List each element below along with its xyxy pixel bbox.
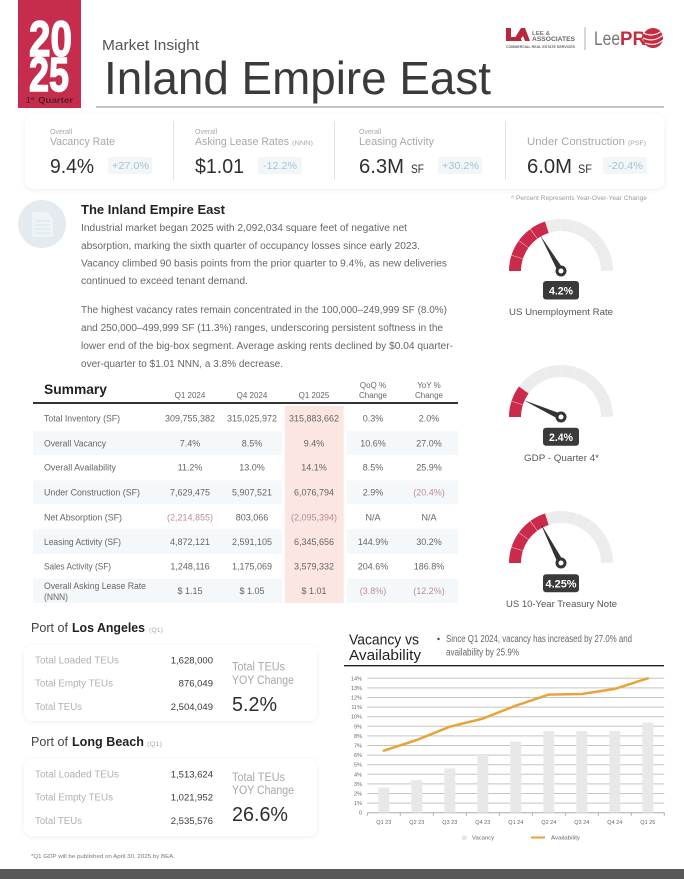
logo: Lee & Associates: COMMERCIAL REAL ESTATE SERVICES [506, 45, 576, 49]
table column headers: Q1 2024 [175, 391, 206, 400]
gauge: US 10-year treasury note: 4.25% [546, 578, 577, 590]
x axis labels: Q1 25 [640, 820, 655, 826]
text block: vacancy note [437, 634, 632, 659]
row: total inventory [44, 414, 439, 424]
year badge: 2025 1st Quarter: st [30, 96, 35, 101]
heading: Vacancy vs Availability: Availability [349, 648, 422, 664]
y axis labels [351, 676, 362, 817]
row: overall vacancy: Overall Vacancy [44, 438, 106, 448]
row: net absorption: Net Absorption (SF) [44, 512, 122, 522]
row: under construction: 5,907,521 [232, 488, 272, 498]
row: sales activity: 204.6% [358, 562, 388, 572]
panel: Los Angeles port stats: Total TEUs [35, 702, 82, 713]
table heading: Summary: Summary [44, 381, 107, 397]
row: sales activity: 1,175,069 [232, 562, 272, 572]
metric: under construction: 6.0M [527, 156, 572, 178]
y axis labels: 4% [354, 772, 362, 778]
text block: vacancy note: Since Q1 2024, vacancy has increased by 27.0% and [446, 634, 632, 645]
metric: leasing activity: Overall [359, 129, 382, 136]
panel: Long Beach port stats: 2,535,576 [171, 816, 213, 827]
panel: Los Angeles port stats: YOY Change [232, 675, 294, 687]
panel: Long Beach port stats: 1,021,952 [171, 792, 213, 804]
x axis labels: Q4 23 [475, 820, 490, 826]
icon: document [18, 200, 66, 248]
panel: Long Beach port stats: Total TEUs [232, 772, 285, 784]
row: leasing activity: 2,591,105 [232, 537, 272, 547]
panel: Long Beach port stats: 1,513,624 [171, 770, 213, 780]
text block: vacancy note: availability by 25.9% [446, 648, 519, 659]
row: net absorption: (2,095,394) [291, 512, 337, 522]
row: overall asking lease rate: (NNN) [44, 592, 68, 602]
row: overall availability [44, 463, 442, 473]
y axis labels: 3% [354, 782, 362, 788]
text block: market commentary: absorption, marking the sixth quarter of occupancy losses since early 2023. [81, 241, 420, 252]
panel: Los Angeles port stats: 1,628,000 [171, 656, 213, 666]
row: overall vacancy: 7.4% [180, 438, 200, 448]
text block: market commentary [81, 202, 453, 370]
row: net absorption: (2,214,855) [167, 512, 213, 522]
logo: LeePRO [594, 28, 663, 50]
metric: asking lease rates: Overall [195, 129, 218, 136]
x axis labels: Q1 24 [508, 820, 523, 826]
vacancy bars [378, 722, 653, 813]
row: under construction: 2.9% [363, 488, 383, 498]
table column headers: QoQ % [360, 381, 386, 390]
metric: asking lease rates [195, 129, 313, 178]
row: leasing activity: 30.2% [416, 537, 442, 547]
panel: Long Beach port stats: YOY Change [232, 785, 294, 797]
row: overall availability: 25.9% [416, 463, 442, 473]
table column headers: YoY % [417, 381, 441, 390]
text block: market commentary: lower end of the big-box segment. Average asking rents declined by $0.04 quarter- [81, 341, 453, 352]
panel: Los Angeles port stats: 876,049 [179, 678, 213, 690]
y axis labels: 6% [354, 753, 362, 759]
row: overall asking lease rate [44, 581, 445, 602]
availability line [384, 678, 648, 751]
row: overall vacancy: 27.0% [416, 438, 442, 448]
x axis labels [376, 820, 655, 826]
row: overall asking lease rate: $ 1.05 [239, 586, 265, 596]
y axis labels: 8% [354, 734, 362, 740]
heading: Port of Long Beach: Long Beach [72, 735, 144, 749]
x axis labels: Q2 23 [409, 820, 424, 826]
footer bar [0, 869, 684, 879]
panel: Los Angeles port stats: 5.2% [232, 694, 277, 716]
chart legend: Availability [551, 836, 580, 842]
x axis labels: Q3 24 [574, 820, 589, 826]
heading: Port of Long Beach: Port of [31, 735, 69, 749]
row: under construction: 6,076,794 [294, 488, 334, 498]
x axis labels: Q4 24 [607, 820, 622, 826]
logo: Lee & Associates: ASSOCIATES [532, 37, 575, 43]
table: summary [33, 381, 458, 603]
row: overall asking lease rate: $ 1.01 [301, 586, 327, 596]
panel: Los Angeles port stats: 2,504,049 [171, 702, 213, 713]
metric: asking lease rates: (NNN) [292, 141, 313, 147]
text block: market commentary: The Inland Empire East [81, 202, 226, 217]
table column headers: Q4 2024 [237, 391, 268, 400]
row: overall asking lease rate: Overall Asking Lease Rate [44, 581, 146, 591]
y axis labels: 10% [351, 715, 362, 721]
heading: Port of Los Angeles: Los Angeles [72, 621, 145, 635]
heading: Vacancy vs Availability [349, 632, 422, 664]
heading: Port of Long Beach: (Q1) [147, 741, 162, 748]
row: sales activity: 1,248,116 [170, 562, 210, 572]
row: total inventory: 0.3% [363, 414, 383, 424]
row: under construction [44, 488, 445, 498]
y axis labels: 13% [351, 686, 362, 692]
metric: under construction: (PSF) [628, 141, 646, 147]
panel: Long Beach port stats [24, 759, 317, 836]
metric: leasing activity: SF [411, 162, 424, 176]
chart: vacancy bars and availability line [351, 676, 664, 842]
y axis labels: 0 [359, 811, 362, 817]
panel: Long Beach port stats: Total Empty TEUs [35, 792, 113, 804]
row: overall vacancy [44, 438, 442, 448]
row: leasing activity: 4,872,121 [170, 537, 210, 547]
row: overall availability: 13.0% [239, 463, 265, 473]
metric: leasing activity [359, 129, 482, 178]
panel: Long Beach port stats: 26.6% [232, 804, 288, 826]
row: total inventory: Total Inventory (SF) [44, 414, 120, 424]
panel: Long Beach port stats: Total TEUs [35, 816, 82, 827]
metric: leasing activity: +30.2% [442, 161, 479, 172]
text block: market commentary: and 250,000–499,999 SF (11.3%) ranges, underscoring persistent softness in the [81, 323, 443, 334]
metric: under construction: -20.4% [608, 161, 643, 172]
y axis labels: 9% [354, 724, 362, 730]
metric: vacancy rate: Overall [50, 129, 73, 136]
y axis labels: 12% [351, 696, 362, 702]
gauge: US unemployment rate [509, 225, 613, 318]
logo: Lee & Associates: LEE & [532, 31, 550, 37]
row: overall asking lease rate: (12.2%) [413, 586, 445, 596]
row: total inventory: 2.0% [419, 414, 439, 424]
text block: market commentary: The highest vacancy rates remain concentrated in the 100,000–249,999 SF (8.0%) [81, 305, 447, 316]
y axis labels: 11% [351, 705, 362, 711]
gauge: GDP quarter 4: 2.4% [549, 432, 573, 444]
row: overall vacancy: 9.4% [304, 438, 324, 448]
gauge: US unemployment rate: US Unemployment Rate [509, 307, 613, 318]
panel: Los Angeles port stats: Total Loaded TEUs [35, 656, 119, 666]
row: leasing activity: Leasing Activity (SF) [44, 537, 121, 547]
row: overall availability: 14.1% [301, 463, 327, 473]
footnote: percent meaning: ^ Percent Represents Year-Over-Year Change [511, 195, 647, 202]
metric: asking lease rates: $1.01 [195, 156, 244, 178]
row: net absorption: N/A [365, 512, 381, 522]
x axis labels: Q3 23 [442, 820, 457, 826]
heading: Port of Los Angeles: Port of [31, 621, 69, 635]
row: sales activity: Sales Activity (SF) [44, 562, 111, 572]
gauge: US 10-year treasury note [506, 517, 617, 610]
logo: Lee & Associates [506, 28, 576, 49]
chart legend [462, 836, 580, 842]
metric: under construction [527, 136, 647, 178]
row: sales activity: 3,579,332 [294, 562, 334, 572]
row: overall vacancy: 8.5% [242, 438, 262, 448]
row: sales activity: 186.8% [414, 562, 444, 572]
year badge: 2025 1st Quarter: Quarter [38, 96, 73, 105]
logo: LeePRO: Lee [594, 29, 620, 50]
logo: LeePRO: PR [620, 29, 646, 50]
year badge: 2025 1st Quarter: 20 [29, 11, 72, 67]
footnote: GDP publication date: *Q1 GDP will be published on April 30, 2025 by BEA. [31, 854, 175, 860]
metric: vacancy rate [50, 129, 152, 178]
heading: Port of Los Angeles: (Q1) [149, 627, 163, 634]
row: total inventory: 315,025,972 [227, 414, 277, 424]
row: total inventory: 315,883,662 [289, 414, 339, 424]
panel: Long Beach port stats: Total Loaded TEUs [35, 770, 119, 780]
y axis labels: 14% [351, 676, 362, 682]
row: under construction: 7,629,475 [170, 488, 210, 498]
x axis labels: Q2 24 [541, 820, 556, 826]
table column headers [175, 381, 444, 400]
gauge: GDP quarter 4: GDP - Quarter 4* [524, 453, 599, 464]
panel: Los Angeles port stats: Total TEUs [232, 662, 285, 674]
row: net absorption: N/A [421, 512, 437, 522]
gauge: US unemployment rate: 4.2% [549, 286, 573, 298]
row: net absorption [44, 512, 437, 522]
row: under construction: Under Construction (SF) [44, 488, 140, 498]
heading: Port of Los Angeles [31, 621, 163, 635]
text block: market commentary: Vacancy climbed 90 basis points from the prior quarter to 9.4%, as new deliveries [81, 258, 447, 270]
text block: market commentary: Industrial market began 2025 with 2,092,034 square feet of negative net [81, 223, 407, 234]
table column headers: Q1 2025 [299, 391, 330, 400]
gauge: US 10-year treasury note: US 10-Year Treasury Note [506, 599, 617, 610]
metric: vacancy rate: 9.4% [50, 156, 94, 178]
table column headers: Change [415, 391, 444, 400]
report eyebrow: Market Insight: Market Insight [102, 37, 200, 54]
row: net absorption: 803,066 [236, 512, 268, 522]
row: overall availability: Overall Availability [44, 463, 116, 473]
x axis labels: Q1 23 [376, 820, 391, 826]
gauge: GDP quarter 4 [515, 371, 607, 464]
metric: under construction: SF [578, 162, 592, 176]
row: leasing activity [44, 537, 442, 547]
y axis labels: 5% [354, 763, 362, 769]
row: overall availability: 11.2% [178, 463, 202, 473]
row: leasing activity: 144.9% [358, 537, 388, 547]
row: under construction: (20.4%) [413, 488, 445, 498]
heading: Port of Long Beach [31, 735, 162, 749]
row: overall vacancy: 10.6% [360, 438, 386, 448]
heading: Vacancy vs Availability: Vacancy vs [349, 632, 419, 648]
panel: Los Angeles port stats [24, 645, 317, 721]
y axis labels: 7% [354, 744, 362, 750]
metric: leasing activity: Leasing Activity [359, 136, 434, 148]
text block: market commentary: continued to exceed tenant demand. [81, 276, 248, 287]
row: total inventory: 309,755,382 [165, 414, 215, 424]
y axis labels: 2% [354, 792, 362, 798]
row: overall asking lease rate: $ 1.15 [177, 586, 203, 596]
panel: Los Angeles port stats: Total Empty TEUs [35, 678, 113, 690]
row: leasing activity: 6,345,656 [294, 537, 334, 547]
row: overall asking lease rate: (3.8%) [360, 586, 386, 596]
metric: leasing activity: 6.3M [359, 156, 404, 178]
row: sales activity [44, 562, 444, 572]
year badge: 2025 1st Quarter: 25 [29, 49, 69, 102]
year badge: 2025 1st Quarter: 1 [26, 96, 31, 105]
y axis labels: 1% [354, 801, 362, 807]
metric: vacancy rate: +27.0% [112, 161, 149, 172]
chart legend: Vacancy [472, 836, 494, 842]
metric: vacancy rate: Vacancy Rate [50, 136, 115, 148]
text block: market commentary: over-quarter to $1.01 NNN, a 3.8% decrease. [81, 359, 283, 370]
year badge: 2025 1st Quarter [18, 0, 81, 108]
metric: under construction: Under Construction [527, 136, 625, 148]
title: Inland Empire East: Inland Empire East [104, 52, 491, 104]
metric: asking lease rates: -12.2% [263, 161, 297, 172]
table column headers: Change [359, 391, 388, 400]
metric: asking lease rates: Asking Lease Rates [195, 136, 289, 148]
row: overall availability: 8.5% [363, 463, 383, 473]
panel: key metrics [25, 114, 664, 189]
